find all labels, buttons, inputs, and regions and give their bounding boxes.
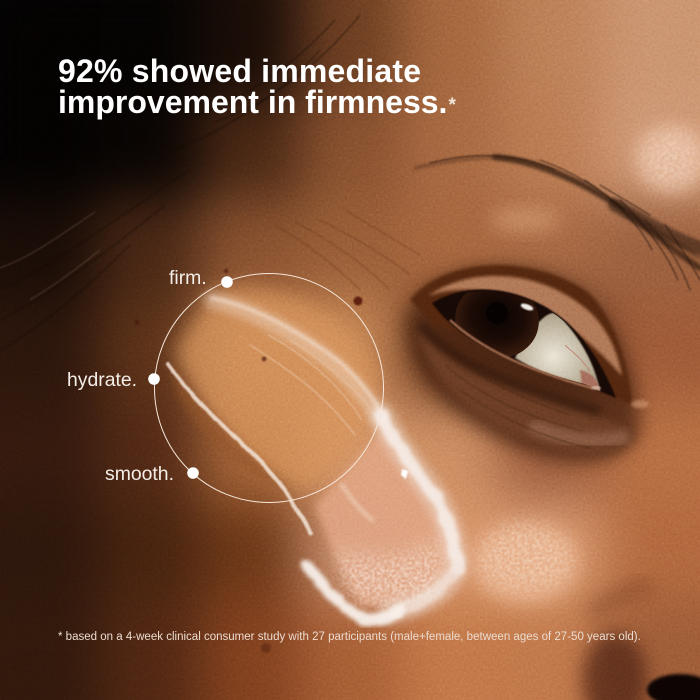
mole xyxy=(354,296,362,306)
label: smooth: smooth. xyxy=(105,463,174,485)
small skin marks xyxy=(134,269,271,653)
dot: firm xyxy=(221,276,233,288)
cream swatch: mottled film near tip xyxy=(335,535,445,606)
footnote: * based on a 4-week clinical consumer study with 27 participants (male+female, between ages of 27-50 years old). xyxy=(58,631,641,643)
thin ring xyxy=(154,274,384,502)
highlights on forehead and cheek xyxy=(473,126,700,605)
nose shadow and nostril xyxy=(583,585,700,700)
cream swatch: translucent body xyxy=(315,425,455,606)
pale hair flecks xyxy=(0,212,100,300)
dot: smooth xyxy=(187,467,199,479)
lower eyelid wrinkles xyxy=(440,345,590,448)
title: 92% showed immediate xyxy=(58,53,421,89)
label: hydrate: hydrate. xyxy=(67,369,137,391)
dot: hydrate xyxy=(148,373,160,385)
cream swatch: thin left streak xyxy=(168,364,311,534)
eye: lids, iris and sclera xyxy=(410,265,649,408)
title xyxy=(58,53,456,120)
orange treated skin inside the circle xyxy=(175,288,376,490)
wrinkles near temple xyxy=(275,210,420,290)
eye socket shadow xyxy=(405,267,640,461)
darker band of treated skin on lower left of circle xyxy=(174,365,290,490)
under-eye bag xyxy=(416,325,635,456)
eyebrow xyxy=(415,156,700,290)
cream swatch: soft right band and tip xyxy=(308,415,457,620)
title: improvement in firmness.* xyxy=(58,84,456,120)
hair strands along hairline xyxy=(0,15,360,350)
cream swatch: upper dry film xyxy=(212,298,386,520)
cream droplet xyxy=(401,469,408,479)
label: firm: firm. xyxy=(169,267,207,289)
